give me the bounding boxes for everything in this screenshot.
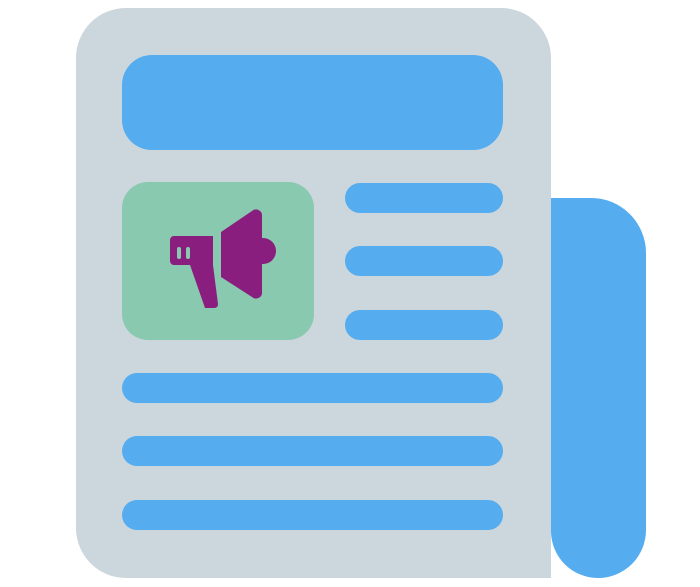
panel: folded back flap xyxy=(551,198,646,578)
text lines: full width xyxy=(122,373,503,530)
icon: megaphone xyxy=(170,209,276,308)
headline bar xyxy=(122,55,503,150)
panel: newspaper page xyxy=(76,8,551,578)
image box with megaphone xyxy=(122,182,314,340)
text lines: right column xyxy=(345,183,503,340)
